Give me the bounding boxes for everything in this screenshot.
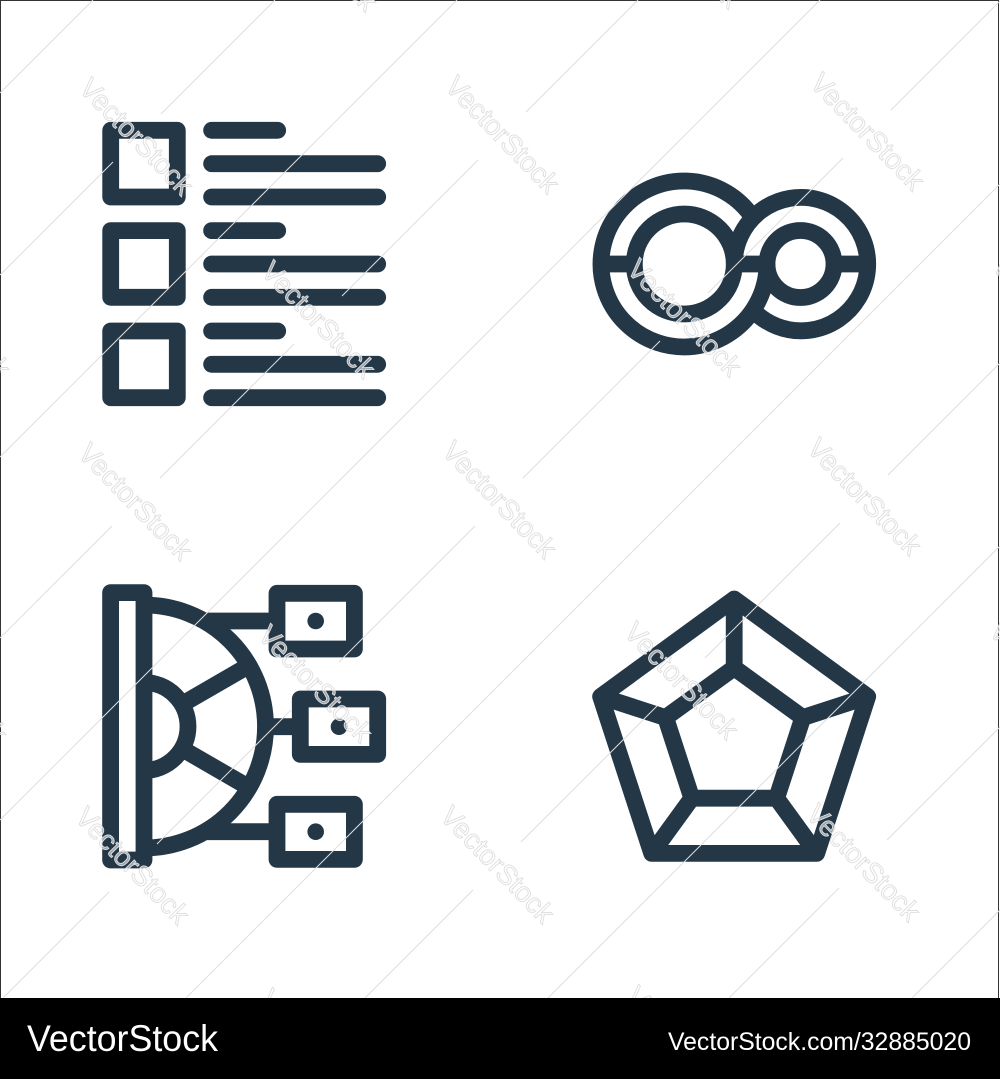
watermarks: VectorStock xyxy=(73,72,200,202)
footer bar xyxy=(0,998,1000,1079)
watermarks: VectorStock xyxy=(801,432,928,562)
watermarks: VectorStock xyxy=(436,435,563,565)
footer image id: VectorStock.com/32885020 xyxy=(668,1029,971,1056)
watermarks: VectorStock xyxy=(439,70,566,200)
watermarks: VectorStock xyxy=(72,437,199,567)
watermarks: VectorStock xyxy=(800,798,927,928)
watermarks: VectorStock xyxy=(434,800,561,930)
watermarks: VectorStock xyxy=(252,619,379,749)
icon: checklist xyxy=(111,130,378,398)
watermarks: VectorStock xyxy=(618,616,745,746)
watermarks: VectorStock xyxy=(255,255,382,385)
icon: semicircle diagram with boxes xyxy=(111,593,378,860)
icon: interlinked circles xyxy=(600,181,868,347)
watermarks: VectorStock xyxy=(69,801,196,931)
icon: pentagon radar chart xyxy=(601,599,868,853)
footer logo text: VectorStock xyxy=(27,1018,218,1059)
watermarks: VectorStock xyxy=(621,253,748,383)
watermarks: VectorStock xyxy=(804,67,931,197)
